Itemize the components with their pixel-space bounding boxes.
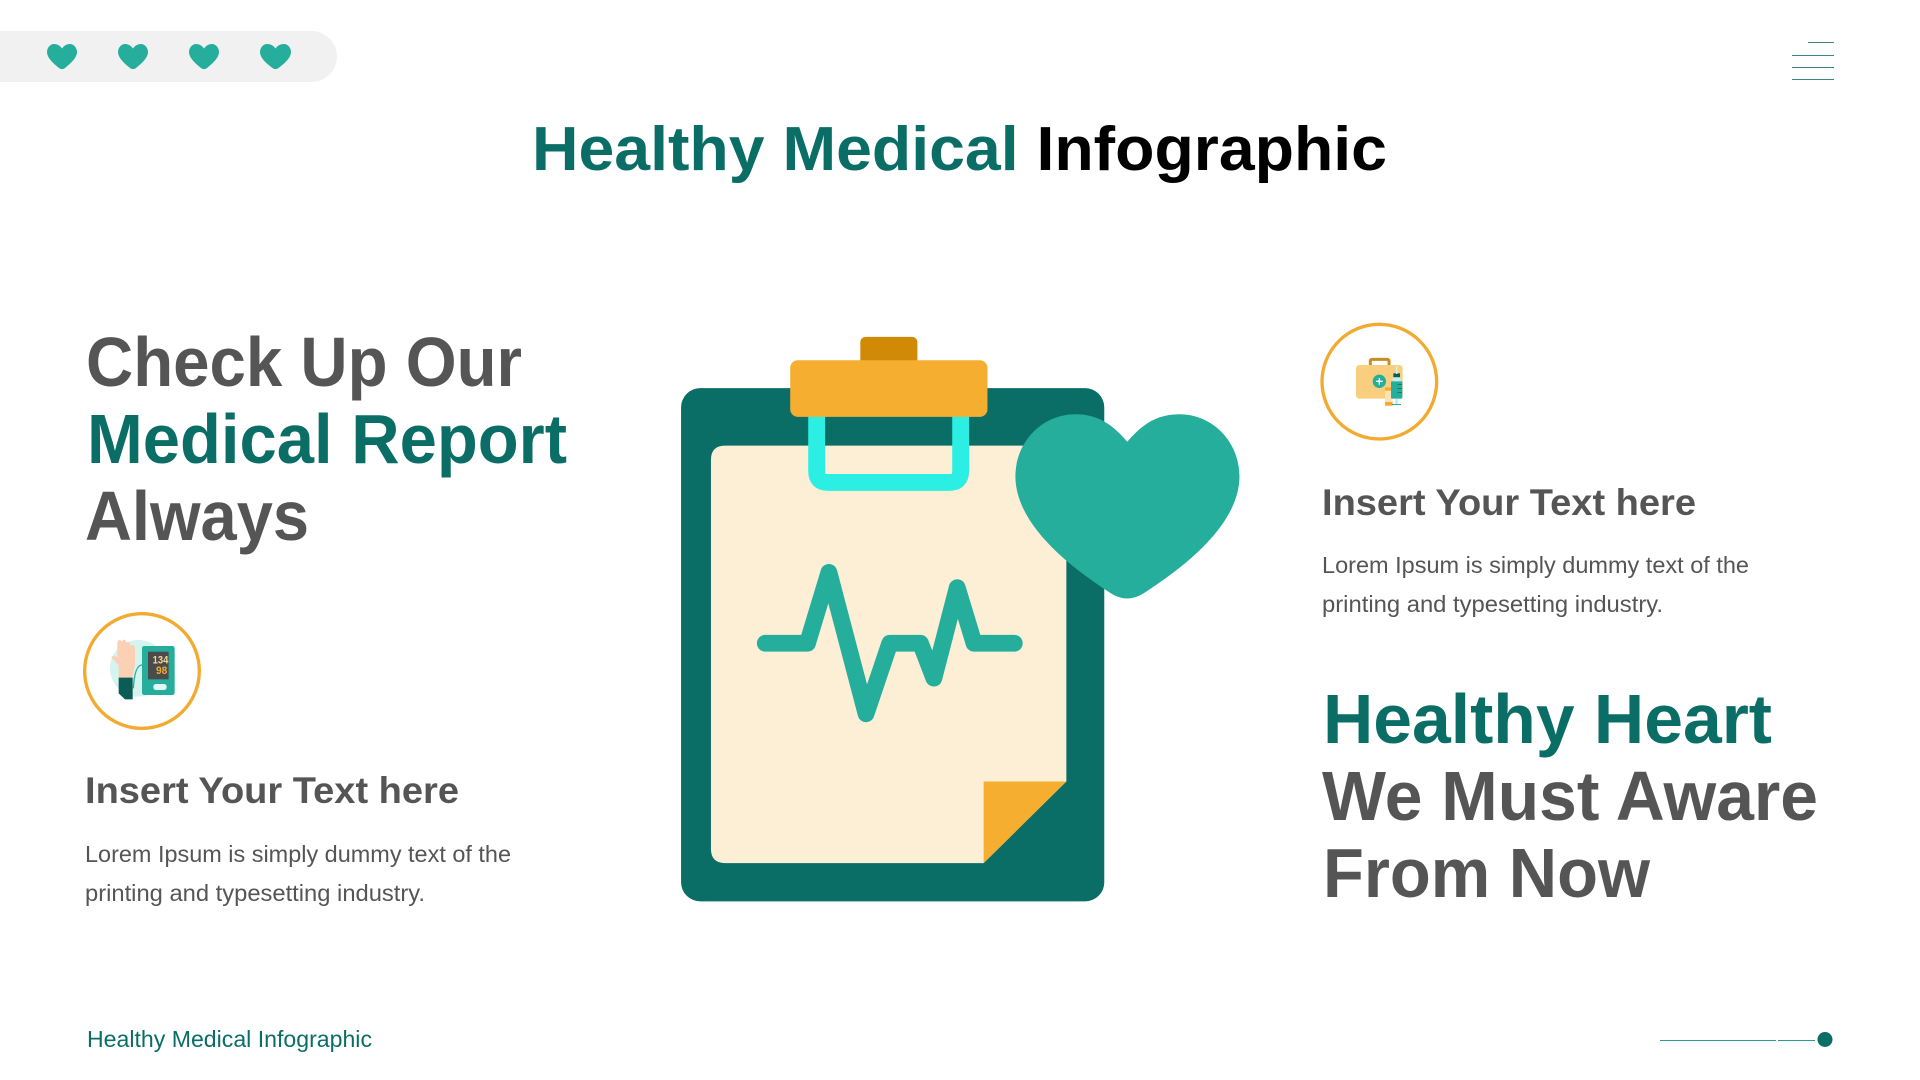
clip bar	[790, 360, 987, 417]
icon: blood pressure monitor: 98	[156, 665, 167, 677]
icon: blood pressure monitor	[85, 614, 199, 728]
icon: blood pressure monitor: 134	[153, 655, 169, 667]
left heading: Always	[85, 477, 309, 555]
left heading: Check Up Our	[86, 323, 522, 401]
left body text: Lorem Ipsum is simply dummy text of the	[85, 841, 511, 867]
clipboard illustration with heart	[681, 337, 1239, 901]
paper sheet	[711, 446, 1066, 863]
footer progress indicator	[1660, 1032, 1832, 1047]
title: Healthy Medical Infographic	[532, 115, 1387, 184]
right body text	[1322, 552, 1749, 617]
right heading: From Now	[1323, 834, 1651, 912]
page fold	[984, 782, 1066, 863]
top bar with hearts	[0, 31, 337, 82]
clipboard board	[681, 388, 1104, 901]
left body text: printing and typesetting industry.	[85, 880, 425, 906]
right heading: Healthy Heart	[1323, 680, 1772, 758]
right subheading: Insert Your Text here	[1322, 482, 1696, 523]
right heading	[1322, 680, 1818, 912]
left heading	[85, 323, 567, 555]
menu icon	[1792, 42, 1834, 80]
ecg line	[765, 572, 1014, 714]
icon: medical case and syringe	[1322, 324, 1437, 439]
right body text: Lorem Ipsum is simply dummy text of the	[1322, 552, 1749, 578]
right body text: printing and typesetting industry.	[1322, 591, 1663, 617]
left subheading: Insert Your Text here	[85, 770, 459, 811]
left heading: Medical Report	[87, 400, 567, 478]
clip top tab	[860, 337, 917, 371]
big heart	[1015, 414, 1239, 598]
right heading: We Must Aware	[1322, 757, 1818, 835]
footer label: Healthy Medical Infographic	[87, 1026, 372, 1052]
clip loop	[817, 412, 961, 482]
left body text	[85, 841, 511, 906]
